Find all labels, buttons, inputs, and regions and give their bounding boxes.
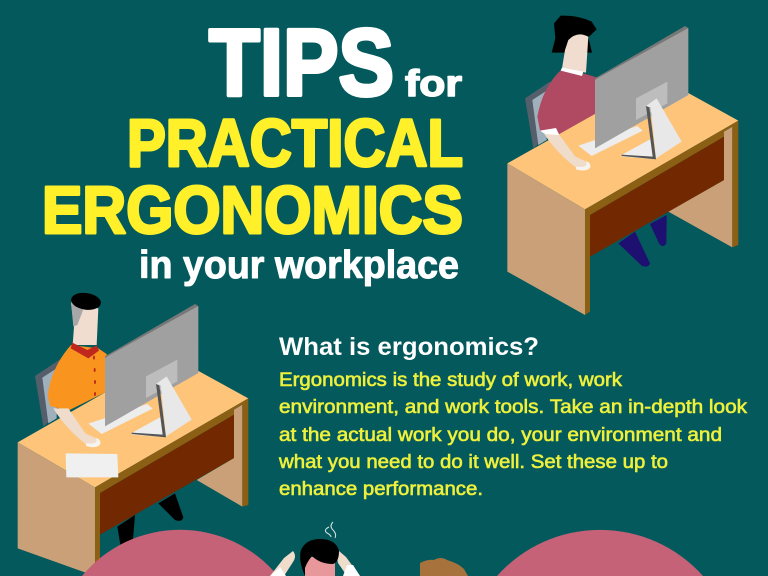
section body: enhance performance.: [279, 479, 483, 500]
title word: TIPS: TIPS: [209, 10, 394, 116]
collar: [561, 68, 583, 76]
section body: at the actual work you do, your environment and: [279, 425, 722, 446]
mouse: [86, 438, 101, 447]
section heading: What is ergonomics?: [279, 333, 539, 361]
title word: PRACTICAL: PRACTICAL: [127, 106, 463, 181]
keyboard: [88, 404, 153, 434]
red collar: [71, 343, 99, 358]
title: [42, 10, 463, 287]
chair: [525, 82, 567, 148]
hair: [300, 539, 339, 576]
hair: [552, 16, 597, 53]
sleeve: [540, 128, 559, 135]
monitor: [595, 26, 688, 159]
face and neck: [562, 34, 588, 73]
grey hair at side: [71, 302, 83, 327]
hair: [70, 291, 102, 312]
title word: ERGONOMICS: ERGONOMICS: [42, 173, 463, 248]
illustration: woman at desk: [507, 16, 738, 315]
mouse: [576, 161, 591, 171]
brown hair figure: [420, 558, 468, 576]
section body: environment, and work tools. Take an in-depth look: [279, 397, 748, 418]
torso: [537, 69, 597, 135]
text block: what is ergonomics: [278, 333, 748, 500]
orange shirt: [48, 345, 107, 411]
paper: [66, 453, 118, 477]
illustration: man at desk: [18, 291, 248, 576]
pink circle right: [497, 530, 703, 576]
chair: [35, 359, 77, 427]
section body: Ergonomics is the study of work, work: [279, 370, 623, 391]
subtitle: in your workplace: in your workplace: [139, 244, 459, 287]
shirt buttons: [93, 356, 96, 396]
section body: what you need to do it well. Set these up to: [278, 452, 668, 473]
stress squiggles: [325, 522, 336, 538]
legs: [117, 493, 183, 547]
section body: [278, 370, 748, 500]
face: [305, 557, 335, 576]
raised arm left: [270, 551, 295, 576]
sleeves: [270, 565, 360, 576]
title word: for: for: [405, 63, 462, 104]
arm: [53, 408, 99, 446]
arm: [544, 134, 589, 169]
face and neck: [71, 303, 98, 345]
pink circle left: [82, 530, 278, 576]
monitor: [105, 304, 198, 437]
raised arm right: [337, 551, 360, 576]
desk: [507, 77, 738, 315]
illustration: stressed person: [270, 522, 360, 576]
legs: [618, 215, 667, 267]
keyboard: [578, 126, 643, 156]
desk: [18, 355, 248, 576]
